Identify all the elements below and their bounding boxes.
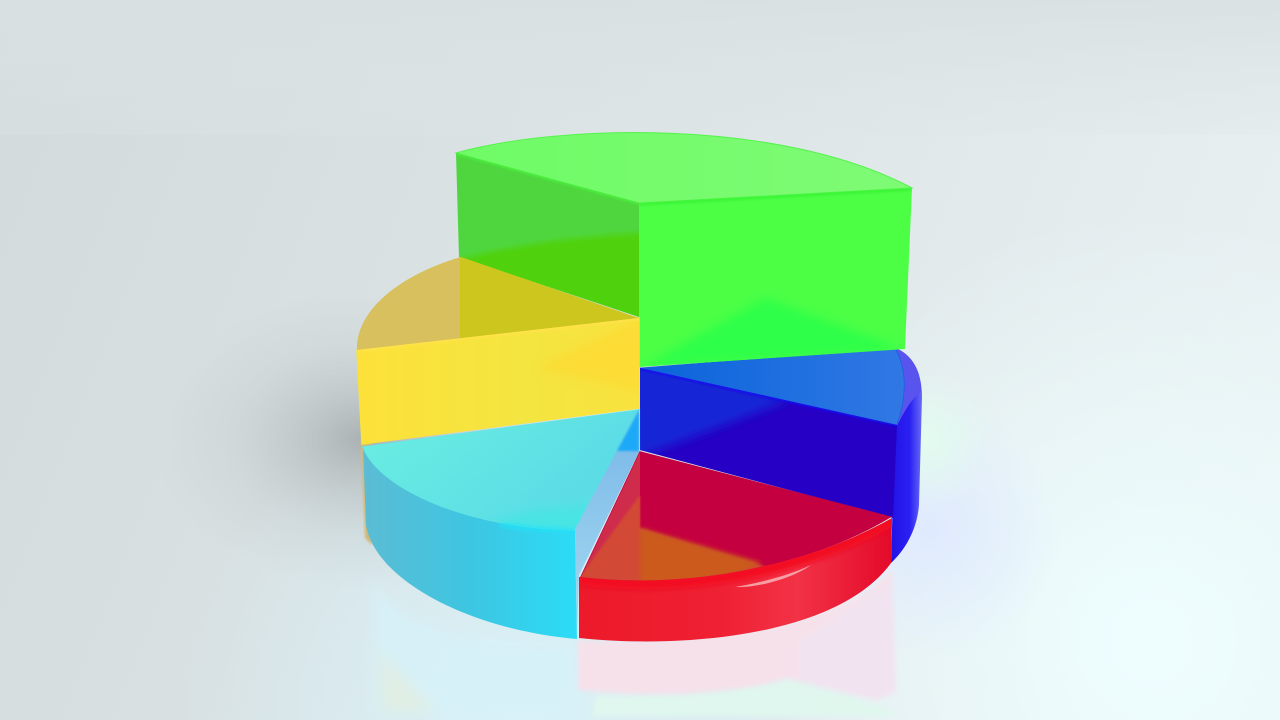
green right face <box>635 185 915 375</box>
slice: cyan <box>360 405 645 639</box>
cyan outer face <box>363 447 577 639</box>
floor reflection of the pie <box>372 570 900 716</box>
blue front face <box>640 368 897 518</box>
cyan cut face <box>575 410 639 638</box>
slice: green tall wedge <box>450 133 915 375</box>
yellow top face <box>356 257 638 350</box>
slice: yellow <box>350 250 645 450</box>
green top face <box>456 133 912 203</box>
blue top face <box>640 348 904 425</box>
red base <box>581 452 890 580</box>
red top face <box>581 452 766 580</box>
cyan backing <box>363 410 639 530</box>
blue top crescent <box>895 348 921 426</box>
slice: blue <box>630 348 922 563</box>
cyan bevel highlight <box>500 524 576 531</box>
cyan cut highlight <box>617 410 639 451</box>
yellow slice base behind cyan <box>361 440 372 545</box>
green left face <box>456 153 639 317</box>
red glossy streak <box>735 565 811 587</box>
slice: red <box>579 451 892 642</box>
cyan top face <box>489 496 592 530</box>
yellow backing <box>357 318 639 444</box>
blue outer rim <box>891 348 922 563</box>
yellow front face <box>357 318 639 444</box>
red outer rim <box>579 518 892 642</box>
